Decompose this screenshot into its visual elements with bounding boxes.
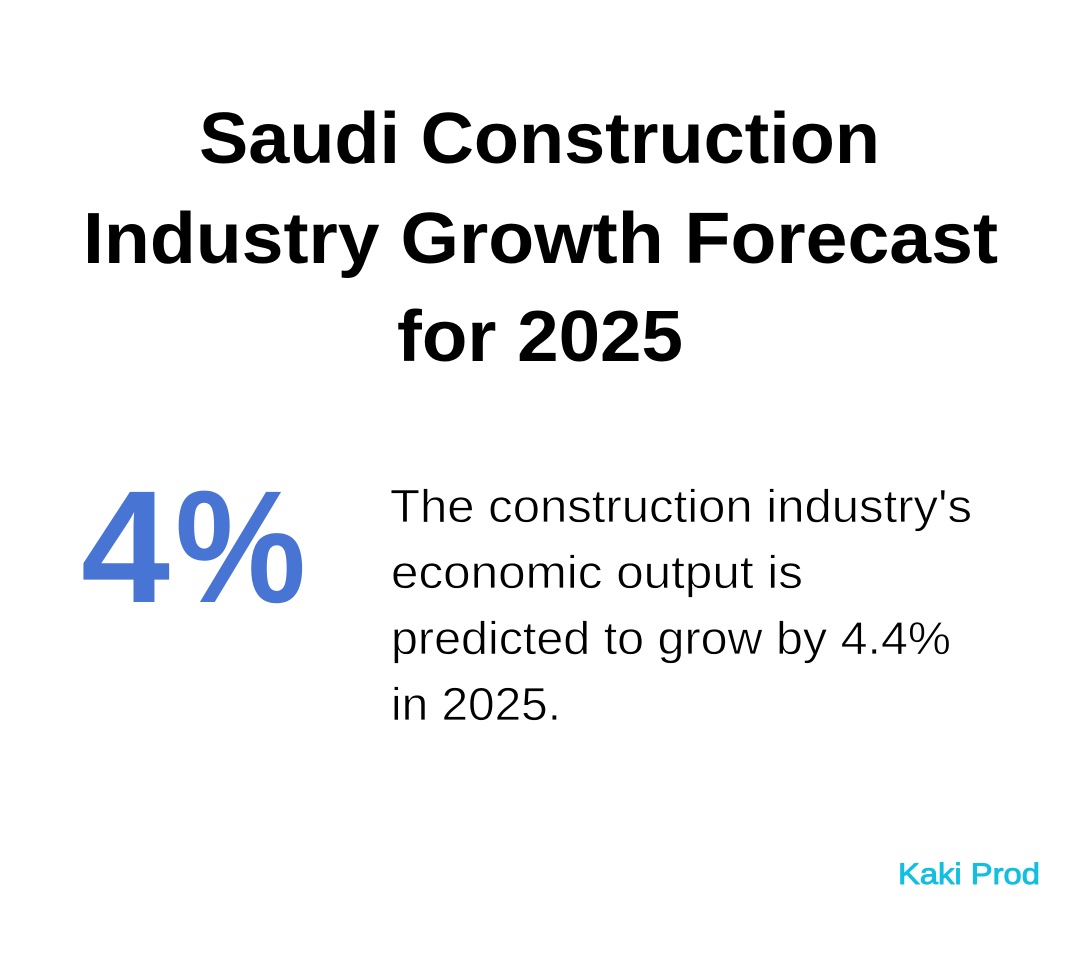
big statistic: 4% [81, 457, 306, 636]
title: for 2025 [397, 297, 683, 377]
description text [390, 480, 972, 730]
description text: predicted to grow by 4.4% [391, 612, 951, 664]
big statistic: 4%: % [175, 457, 306, 636]
big statistic: 4%: 4 [81, 457, 170, 636]
title: Saudi Construction [199, 99, 880, 179]
title [83, 99, 998, 377]
description text: The construction industry's [390, 480, 972, 532]
title: Industry Growth Forecast [83, 199, 998, 279]
description text: economic output is [391, 546, 803, 598]
logo: Kaki Prod: Kaki Prod [898, 858, 1040, 891]
description text: in 2025. [391, 678, 561, 730]
